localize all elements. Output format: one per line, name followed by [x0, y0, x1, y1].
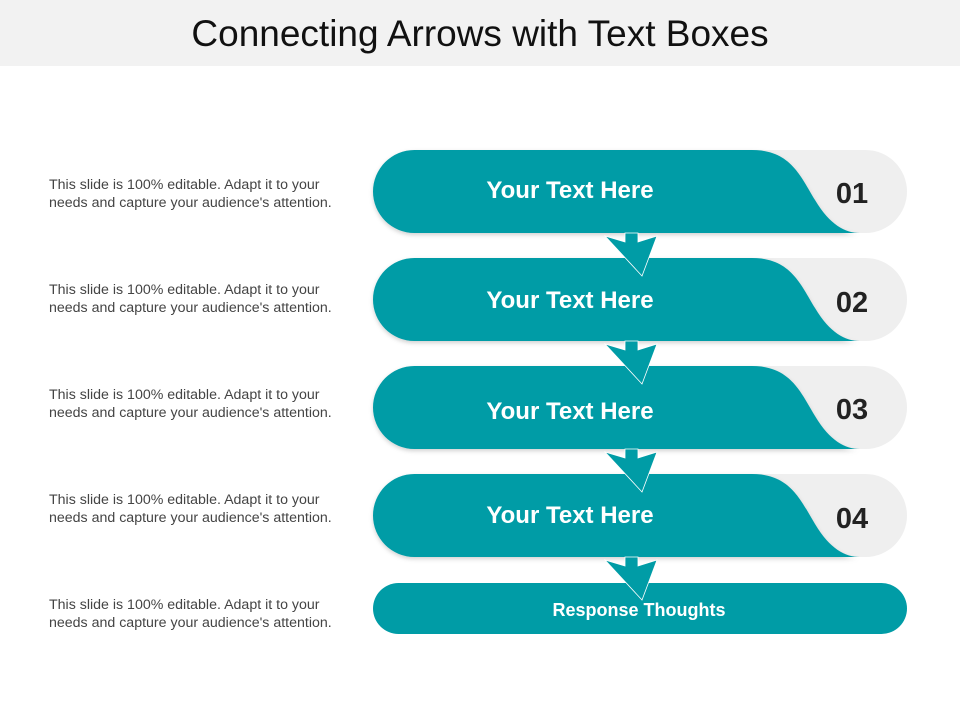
description 2: needs and capture your audience's attention. [49, 300, 332, 316]
step 2 [373, 258, 907, 341]
description 3: needs and capture your audience's attention. [49, 404, 332, 420]
step 4 [373, 474, 907, 557]
step 1: Your Text Here [486, 177, 654, 204]
description 1 [49, 177, 332, 210]
description 4: This slide is 100% editable. Adapt it to your [49, 492, 320, 508]
arrow 2 [605, 341, 657, 384]
title [0, 0, 960, 66]
step 3 [373, 366, 907, 449]
description 2: This slide is 100% editable. Adapt it to your [49, 282, 320, 298]
description 1: needs and capture your audience's attention. [49, 194, 332, 210]
arrow 3 [605, 449, 657, 492]
description 4: needs and capture your audience's attention. [49, 510, 332, 526]
step 2: Your Text Here [486, 287, 654, 314]
response box: Response Thoughts [552, 600, 726, 620]
step 2: 02 [836, 287, 868, 319]
step 3: 03 [836, 394, 868, 426]
description 3: This slide is 100% editable. Adapt it to your [49, 387, 320, 403]
step 1: 01 [836, 178, 868, 210]
description 5: This slide is 100% editable. Adapt it to your [49, 597, 320, 613]
step 1 [373, 150, 907, 233]
description 3 [49, 387, 332, 420]
title: Connecting Arrows with Text Boxes [191, 13, 769, 54]
response box [373, 583, 907, 634]
step 4: 04 [836, 503, 868, 535]
step 3: Your Text Here [486, 398, 654, 425]
description 4 [49, 492, 332, 526]
arrow 1 [605, 233, 657, 276]
arrow 4 [605, 557, 657, 600]
description 5: needs and capture your audience's attention. [49, 614, 332, 630]
step 4: Your Text Here [486, 502, 654, 529]
description 5 [49, 597, 332, 630]
description 1: This slide is 100% editable. Adapt it to your [49, 177, 320, 193]
description 2 [49, 282, 332, 316]
